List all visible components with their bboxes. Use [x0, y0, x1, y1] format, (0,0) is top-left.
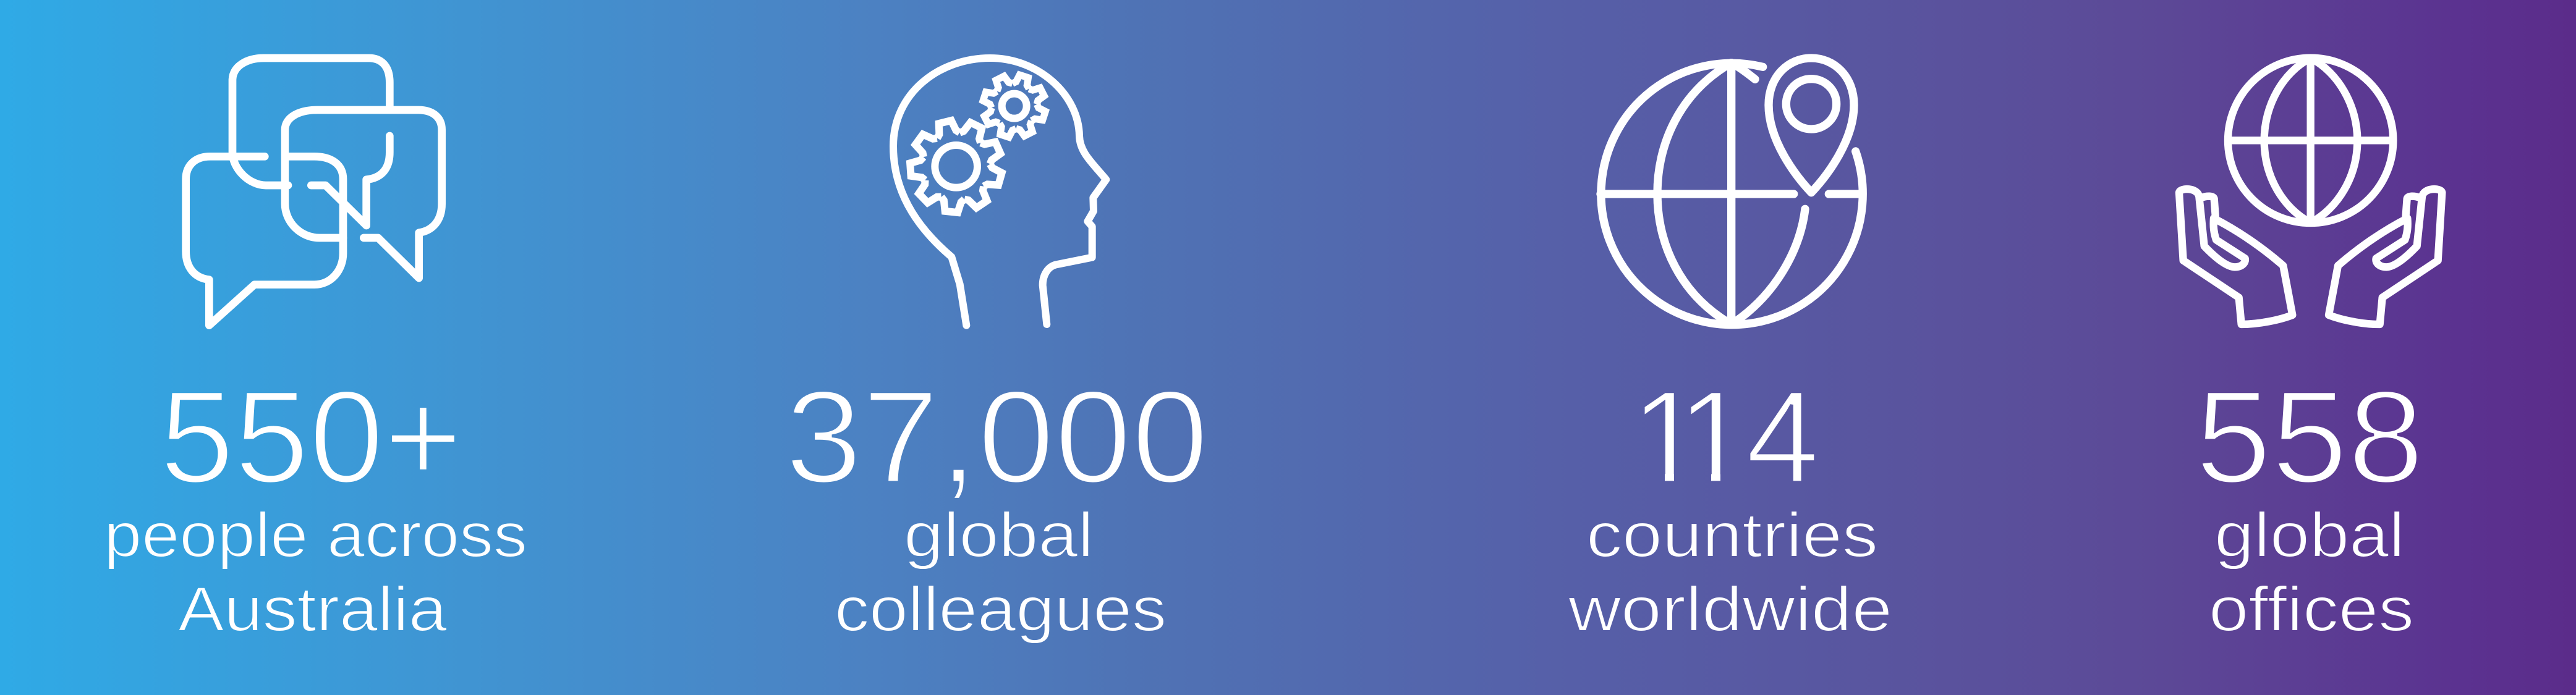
stat: global offices	[2179, 58, 2442, 644]
label: people across Australia	[104, 500, 527, 644]
label: countries worldwide: countries	[1586, 500, 1878, 570]
label: global colleagues	[835, 500, 1167, 644]
stat: countries worldwide	[1568, 58, 1892, 644]
label: countries worldwide	[1568, 500, 1892, 644]
label: global offices: offices	[2209, 574, 2414, 644]
number: 558: 558	[2195, 363, 2424, 511]
stat: people across Australia	[104, 58, 527, 644]
label: global colleagues: colleagues	[835, 574, 1167, 644]
number: 37,000: 37,000	[785, 363, 1209, 511]
icon: hands holding globe	[2179, 58, 2442, 324]
icon: head with gears	[893, 58, 1106, 326]
icon: globe with location pin	[1600, 58, 1863, 325]
label: global offices	[2209, 500, 2414, 644]
number: 550+: 550+	[159, 363, 462, 511]
stat: global colleagues	[785, 58, 1209, 644]
label: global offices: global	[2214, 500, 2405, 570]
label: people across Australia: people across	[104, 500, 527, 570]
label: people across Australia: Australia	[178, 574, 447, 644]
icon: speech bubbles	[186, 58, 442, 326]
number: 114: 114	[1631, 363, 1819, 511]
label: global colleagues: global	[904, 500, 1094, 570]
label: countries worldwide: worldwide	[1568, 574, 1892, 644]
